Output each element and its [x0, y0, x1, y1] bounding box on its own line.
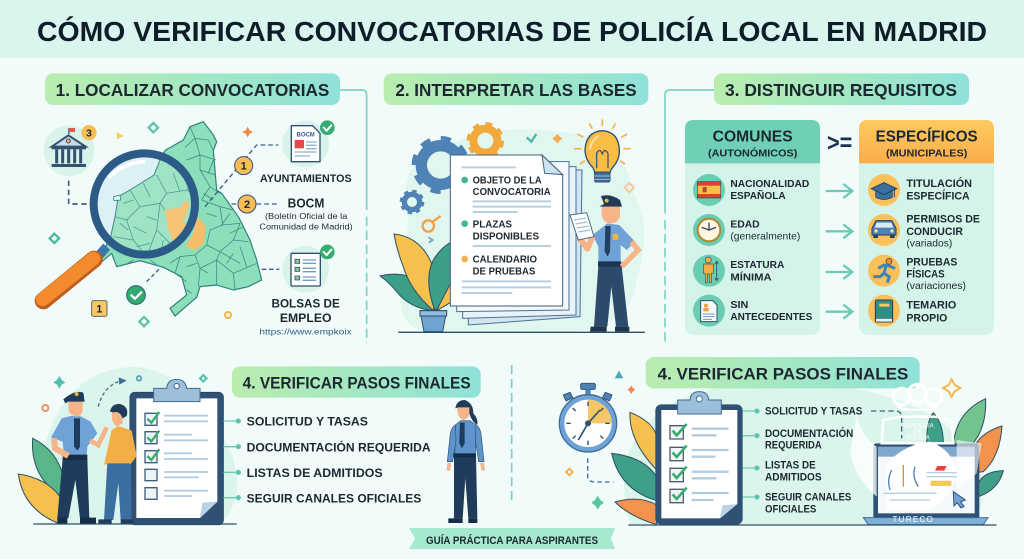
title banner	[0, 0, 1024, 58]
list item: documentacion: REQUERIDA	[765, 440, 822, 452]
list item: listas: LISTAS DE ADMITIDOS	[247, 466, 383, 480]
label: ayuntamientos: AYUNTAMIENTOS	[260, 173, 352, 185]
label: bolsas de empleo: EMPLEO	[280, 311, 332, 325]
text: edad	[730, 220, 800, 242]
badge: square 1	[92, 301, 107, 316]
list item: documentacion	[765, 427, 853, 452]
background blob	[43, 367, 237, 524]
dashed connector: bolsas	[262, 267, 279, 271]
text: temario	[906, 300, 956, 324]
icon: leaves behind laptop	[927, 399, 1003, 497]
text: calendario de pruebas: CALENDARIO	[473, 255, 537, 266]
text: objeto de la convocatoria	[473, 175, 551, 198]
footer ribbon: guia practica	[409, 528, 615, 549]
icon: leaves	[18, 438, 63, 524]
icon: light bulb	[574, 119, 631, 182]
text: permisos: PERMISOS DE	[906, 214, 980, 226]
text: objeto de la convocatoria: OBJETO DE LA	[473, 175, 542, 186]
icon: car	[868, 214, 900, 246]
icon: spanish flag	[693, 174, 725, 206]
icon: plant	[380, 234, 452, 332]
link text: https://www.empkoix	[259, 327, 352, 337]
text: nacionalidad: NACIONALIDAD	[730, 179, 810, 190]
watermark: academia de policia	[850, 383, 982, 524]
icon: orange gear	[469, 124, 502, 157]
dashed connector: badge 1	[205, 145, 278, 207]
list item: solicitud: SOLICITUD Y TASAS	[247, 415, 368, 429]
text: estatura	[730, 260, 785, 283]
text: calendario de pruebas	[473, 255, 537, 278]
icon: BOCM document	[282, 121, 329, 167]
watermark: academia de policia: TURECO	[892, 515, 934, 524]
icon: stopwatch	[559, 383, 617, 452]
heading: 1 localizar: 1. LOCALIZAR CONVOCATORIAS	[56, 80, 329, 100]
text: calendario de pruebas: DE PRUEBAS	[473, 267, 536, 278]
text: plazas disponibles	[473, 219, 539, 242]
text: sin antecedentes: SIN	[730, 300, 748, 311]
list item: seguir: OFICIALES	[765, 503, 816, 515]
center divider	[509, 365, 514, 505]
watermark: academia de policia: POLICIA	[906, 435, 930, 441]
background blob	[624, 382, 984, 524]
panel: 3 distinguir requisitos	[665, 73, 994, 342]
icon: blue gear	[415, 139, 467, 191]
magnifier	[43, 153, 207, 301]
icon: runner	[868, 255, 900, 287]
column: especificos: (MUNICIPALES)	[886, 148, 967, 159]
text: temario: PROPIO	[906, 312, 947, 324]
badge 1	[235, 157, 253, 175]
list item: seguir: SEGUIR CANALES OFICIALES	[247, 491, 421, 505]
icon: graduation cap	[868, 174, 900, 206]
badge 3: 3	[86, 128, 92, 139]
heading: 2 interpretar	[384, 73, 648, 105]
watermark: academia de policia: ACADEMIA	[902, 423, 934, 429]
icon: laptop	[863, 443, 988, 525]
label: BOCM	[259, 197, 353, 232]
column: comunes: (AUTONÓMICOS)	[708, 146, 797, 159]
text: titulacion	[906, 177, 972, 203]
label: bolsas de empleo	[271, 297, 340, 325]
text: titulacion: ESPECÍFICA	[906, 190, 970, 203]
icon: small gear	[401, 191, 423, 213]
list connectors	[743, 409, 759, 499]
arrows: comunes to especificos	[826, 184, 852, 319]
title banner: CÓMO VERIFICAR CONVOCATORIAS DE POLICÍA LOCAL EN MADRID	[37, 16, 987, 47]
connector line	[665, 90, 714, 213]
check badge on map	[127, 268, 160, 304]
heading: 4 verificar: 4. VERIFICAR PASOS FINALES	[243, 374, 471, 393]
ground line	[33, 522, 237, 526]
list item: documentacion: DOCUMENTACIÓN REQUERIDA	[247, 439, 431, 454]
text: nacionalidad: ESPAÑOLA	[730, 189, 786, 202]
heading: 3 distinguir	[714, 73, 969, 105]
icon: clock	[693, 214, 725, 246]
dashed connector: laptop	[871, 411, 902, 438]
ground line	[398, 330, 645, 334]
label: BOCM: (Boletín Oficial de la	[265, 212, 348, 221]
document sheet	[450, 155, 563, 306]
list item: seguir: SEGUIR CANALES	[765, 492, 851, 504]
icon: small magnifier	[423, 216, 441, 243]
icon: height	[693, 255, 725, 287]
text: pruebas: (variaciones)	[906, 281, 966, 292]
heading: 3 distinguir: 3. DISTINGUIR REQUISITOS	[725, 80, 957, 100]
text: permisos: CONDUCIR	[906, 226, 963, 238]
text: edad: EDAD	[730, 220, 760, 231]
icon: record document	[693, 295, 725, 327]
text: temario: TEMARIO	[906, 300, 956, 312]
badge 2	[238, 195, 256, 213]
text: titulacion: TITULACIÓN	[906, 177, 972, 190]
text: edad: (generalmente)	[730, 231, 800, 242]
dashed connector: stopwatch	[588, 458, 613, 482]
icon: clipboard	[655, 392, 743, 525]
column: comunes	[685, 120, 820, 335]
column: especificos	[859, 120, 994, 335]
panel: 4 verificar pasos finales (derecha)	[512, 357, 1003, 525]
list item: solicitud: SOLICITUD Y TASAS	[765, 406, 862, 418]
heading: 4 verificar	[232, 366, 481, 398]
figure: officer with document	[570, 195, 638, 332]
ground line	[628, 523, 997, 527]
dashed connector: town hall to lens	[69, 181, 89, 204]
badge: square 1: 1	[96, 304, 102, 316]
label: BOCM: Comunidad de Madrid)	[259, 223, 353, 232]
list item: documentacion: DOCUMENTACIÓN	[765, 427, 853, 440]
icon: back sheets	[457, 162, 582, 325]
background blob	[400, 129, 644, 332]
text: estatura: MÍNIMA	[730, 270, 772, 283]
badge 3	[81, 125, 97, 140]
text: pruebas: FÍSICAS	[906, 268, 945, 281]
badge 1: 1	[241, 161, 247, 173]
text: sin antecedentes: ANTECEDENTES	[730, 312, 812, 323]
figure: civilian	[98, 404, 137, 524]
column: comunes: COMUNES	[713, 129, 793, 146]
figure: female officer	[447, 400, 484, 523]
badge 2: 2	[244, 199, 250, 211]
check badge: bolsas	[320, 245, 335, 259]
icon: checklist document	[282, 246, 329, 293]
text: permisos	[906, 214, 980, 249]
text: permisos: (variados)	[906, 238, 952, 249]
text: objeto de la convocatoria: CONVOCATORIA	[473, 187, 551, 198]
check badge: BOCM	[320, 120, 335, 135]
icon: book	[868, 295, 900, 327]
text: nacionalidad	[730, 179, 810, 202]
list item: listas	[765, 460, 822, 483]
figure: officer	[51, 392, 107, 524]
map: Comunidad de Madrid	[100, 122, 262, 316]
decorative shapes	[527, 134, 634, 192]
symbol: greater or equal: >=	[827, 130, 852, 157]
label: bolsas de empleo: BOLSAS DE	[271, 297, 340, 311]
text: plazas disponibles: PLAZAS	[473, 219, 512, 230]
heading: 4 verificar	[646, 357, 920, 388]
decorative shapes	[566, 371, 960, 509]
list item: seguir	[765, 492, 851, 515]
heading: 4 verificar: 4. VERIFICAR PASOS FINALES	[658, 364, 908, 383]
text: sin antecedentes	[730, 300, 812, 323]
list connectors	[223, 419, 240, 500]
icon: BOCM document: BOCM	[297, 133, 315, 139]
connector line to panel 2	[340, 90, 367, 210]
footer ribbon: guia practica: GUÍA PRÁCTICA PARA ASPIRANTES	[426, 534, 598, 547]
column: especificos: ESPECÍFICOS	[876, 127, 978, 146]
panel: 2 interpretar las bases	[380, 73, 648, 332]
heading: 2 interpretar: 2. INTERPRETAR LAS BASES	[395, 80, 637, 100]
text: pruebas: PRUEBAS	[906, 256, 957, 268]
label: BOCM: BOCM	[288, 197, 324, 211]
list item: listas: LISTAS DE	[765, 460, 816, 472]
panel: 1 localizar convocatorias	[43, 73, 367, 343]
icon: leaves	[612, 412, 657, 525]
text: estatura: ESTATURA	[730, 260, 785, 271]
decorative shapes	[50, 123, 253, 326]
dashed connector: badge 2	[232, 202, 278, 206]
heading: 1 localizar	[45, 73, 340, 105]
text: plazas disponibles: DISPONIBLES	[473, 231, 539, 242]
watermark: academia de policia: DE	[914, 429, 922, 435]
list item: listas: ADMITIDOS	[765, 471, 822, 483]
panel: 4 verificar pasos finales (izquierda)	[18, 366, 484, 525]
dashed arrow	[98, 377, 127, 407]
text: pruebas	[906, 256, 966, 292]
decorative shapes	[42, 375, 207, 411]
icon: town hall	[44, 125, 94, 176]
icon: clipboard	[130, 379, 223, 525]
